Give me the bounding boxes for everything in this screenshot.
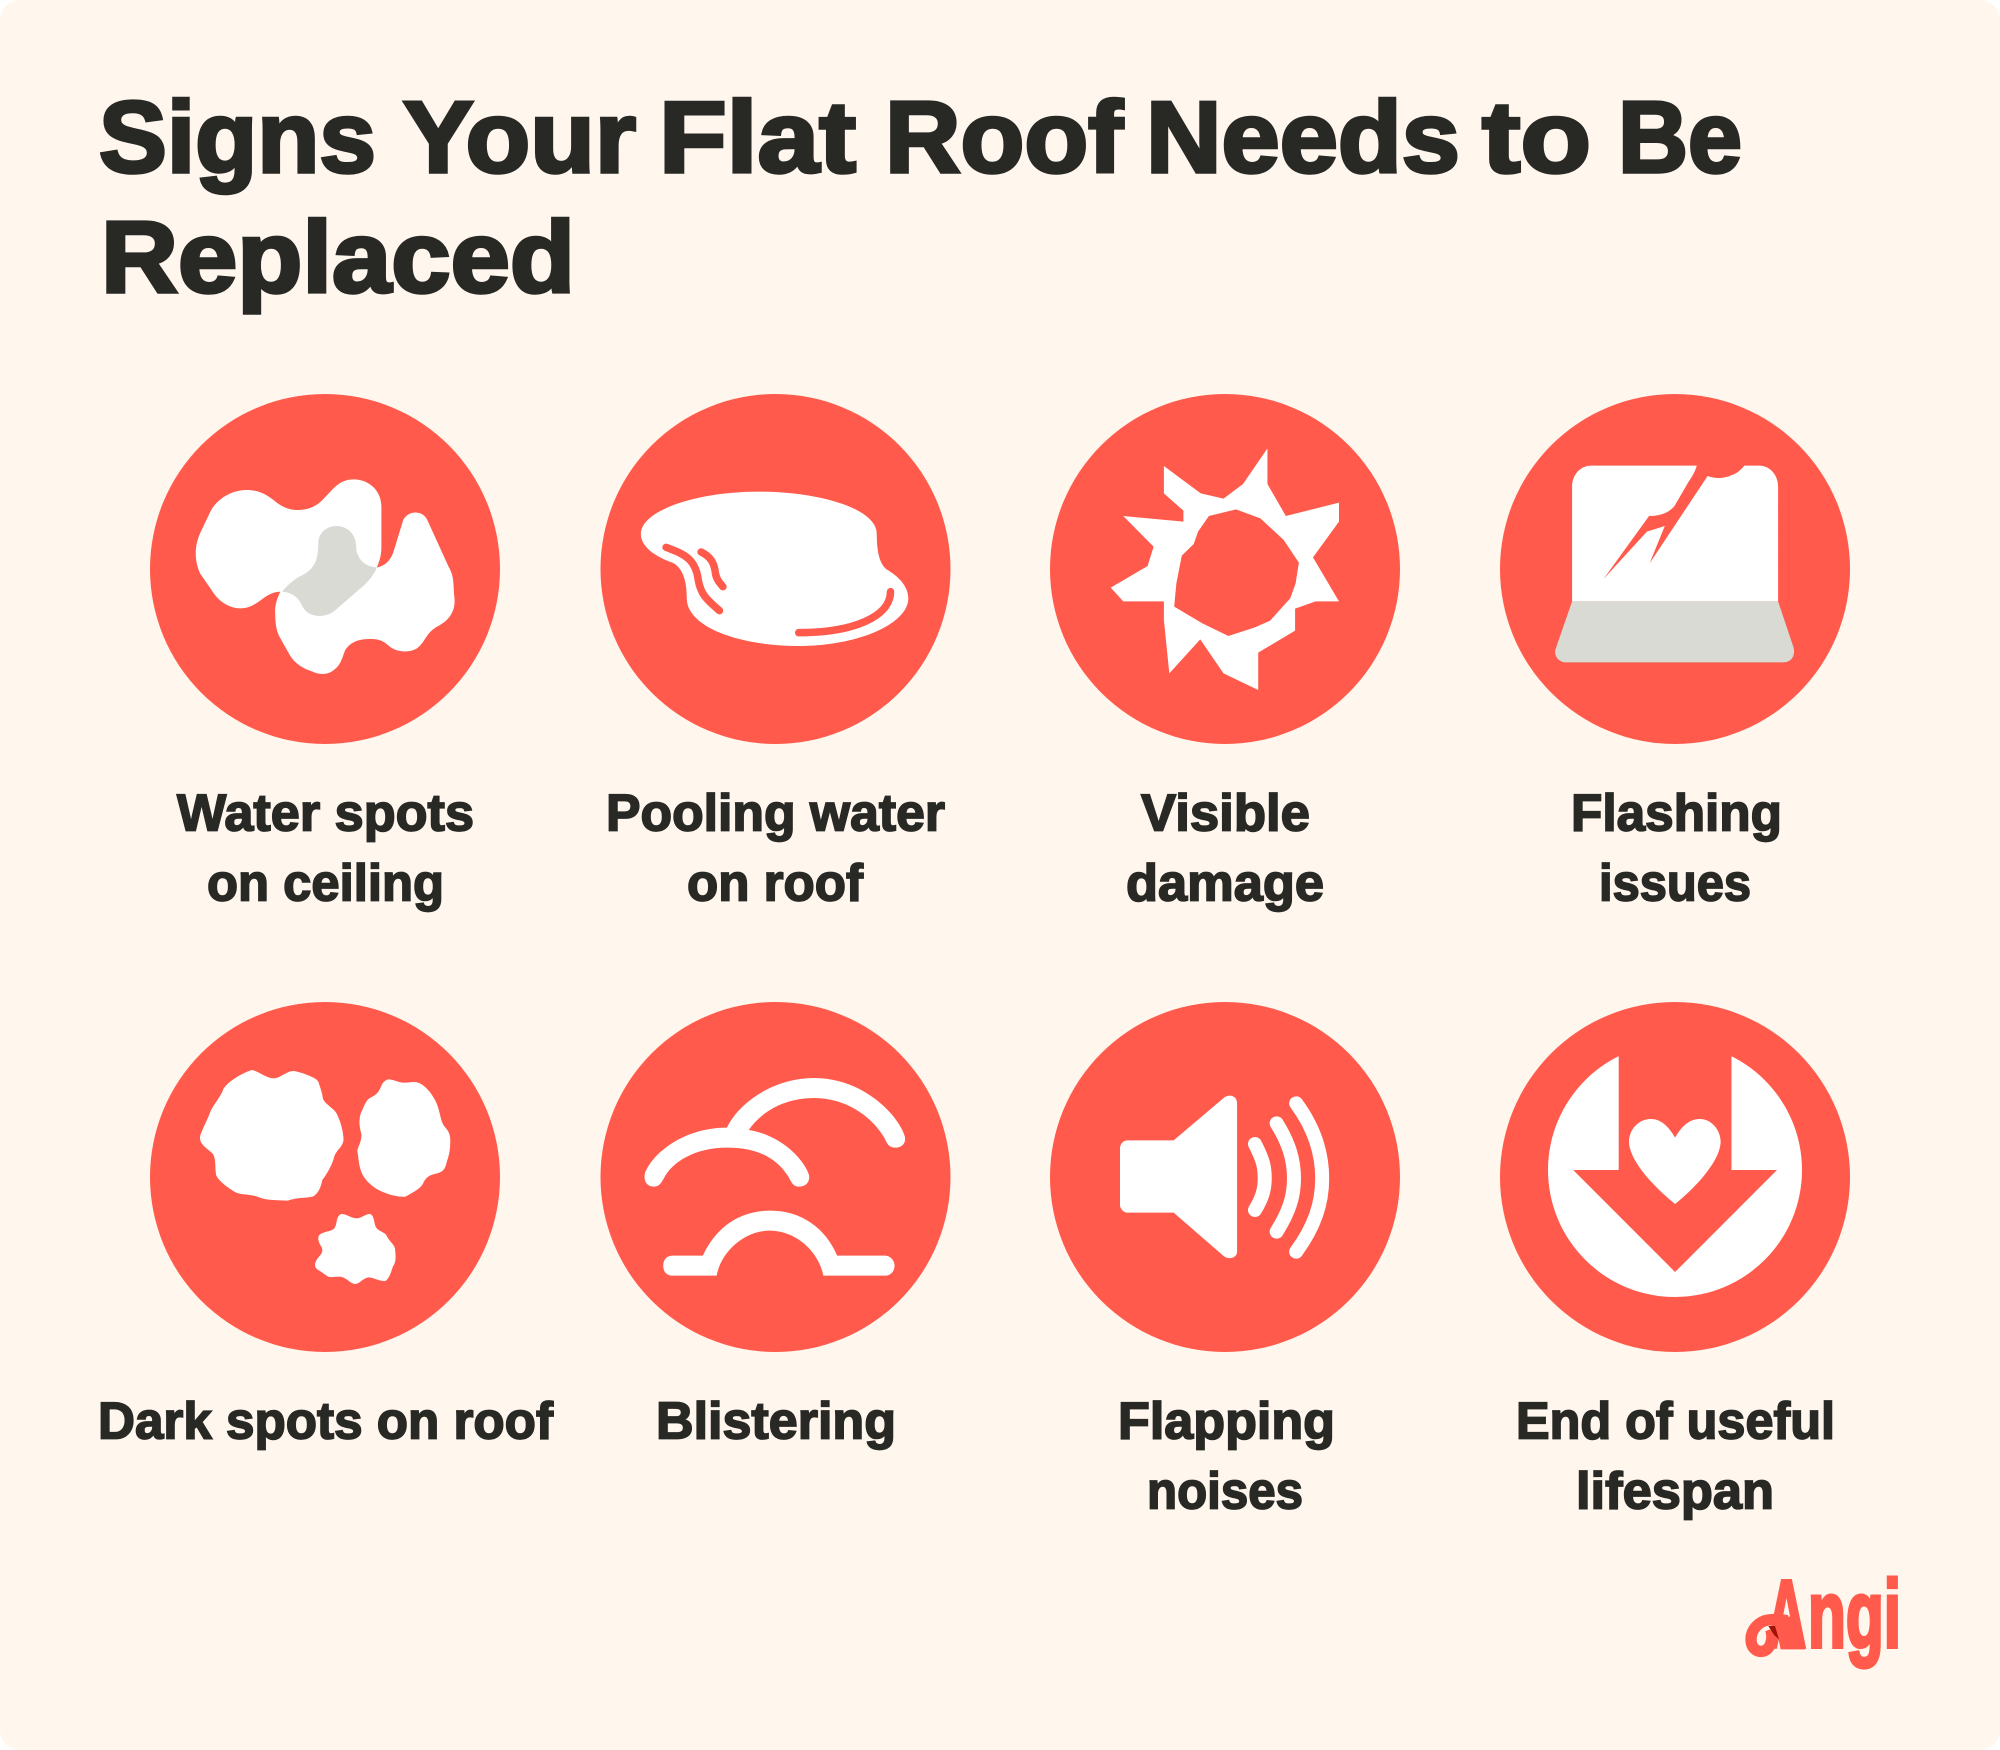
label: pooling water on roof: on roof [687, 854, 864, 912]
label: flashing issues: issues [1599, 854, 1751, 912]
logo: Angi: ngi [1808, 1561, 1901, 1668]
label: pooling water on roof: Pooling water [606, 784, 945, 842]
logo: Angi: A [1767, 1561, 1806, 1668]
title: Be [1618, 82, 1742, 194]
panel: water spots on ceiling [150, 394, 500, 912]
label: flashing issues: Flashing [1571, 784, 1782, 842]
label: pooling water on roof [606, 784, 945, 912]
panel: flashing issues [1500, 394, 1850, 912]
label: water spots on ceiling: on ceiling [207, 854, 444, 912]
title: Signs [99, 82, 376, 194]
label: dark spots on roof: Dark spots on roof [98, 1392, 554, 1450]
label: end of useful lifespan: End of useful [1516, 1392, 1835, 1450]
title [99, 82, 1742, 314]
panel: blistering [600, 1002, 950, 1450]
label: flashing issues [1571, 784, 1782, 912]
label: blistering: Blistering [656, 1392, 896, 1450]
panel: visible damage [1050, 394, 1400, 912]
icon: dark spots [150, 1002, 500, 1352]
icon: roof hole [1050, 394, 1400, 744]
panel: end of useful lifespan [1500, 1002, 1850, 1520]
logo: Angi [1751, 1561, 1901, 1668]
title: to [1482, 82, 1591, 194]
label: end of useful lifespan [1516, 1392, 1835, 1520]
title: Roof [885, 82, 1123, 194]
label: water spots on ceiling: Water spots [177, 784, 474, 842]
label: water spots on ceiling [177, 784, 474, 912]
panel: pooling water on roof [600, 394, 950, 912]
icon: water spots [150, 394, 500, 744]
label: flapping noises: Flapping [1118, 1392, 1335, 1450]
title: Your [403, 82, 636, 194]
panel: dark spots on roof [98, 1002, 554, 1450]
icon: cracked flashing [1500, 394, 1850, 744]
title: Flat [659, 82, 856, 194]
title: Replaced [101, 202, 575, 314]
label: visible damage: Visible [1141, 784, 1310, 842]
label: end of useful lifespan: lifespan [1576, 1462, 1774, 1520]
icon: pooling water [600, 394, 950, 744]
label: visible damage [1126, 784, 1324, 912]
icon: speaker [1050, 1002, 1400, 1352]
icon: heart and down arrow [1500, 1002, 1850, 1352]
panel: flapping noises [1050, 1002, 1400, 1520]
icon: blisters [600, 1002, 950, 1352]
title: Needs [1146, 82, 1460, 194]
label: visible damage: damage [1126, 854, 1324, 912]
label: flapping noises [1118, 1392, 1335, 1520]
label: flapping noises: noises [1147, 1462, 1303, 1520]
